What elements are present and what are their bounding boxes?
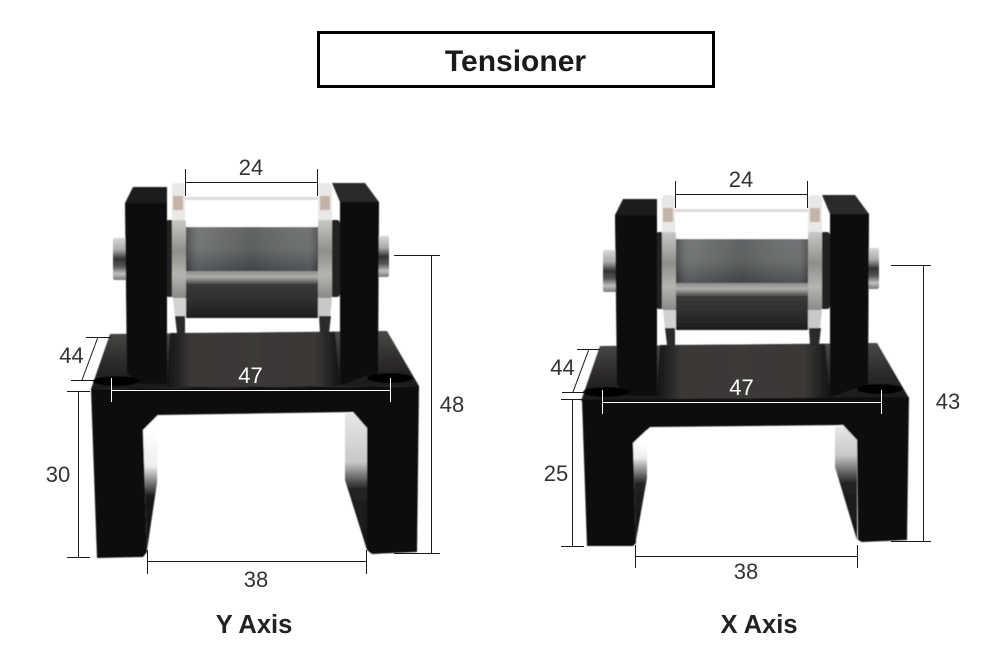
white dimension line: Y axis width (111, 378, 391, 402)
dimension lines: X axis (561, 181, 931, 568)
photo: X axis tensioner (581, 195, 909, 546)
dimension labels: X axis: 43 (936, 389, 960, 414)
dimension labels: X axis: 24 (729, 167, 753, 192)
photo: Y axis tensioner (91, 183, 419, 558)
dimension labels: Y axis: 38 (244, 567, 268, 592)
dimension labels: X axis (544, 167, 960, 584)
dimension labels: X axis: 38 (734, 559, 758, 584)
title box: Tensioner (445, 45, 586, 78)
dimension labels: Y axis: 24 (239, 155, 263, 180)
dimension labels: X axis: 47 (729, 375, 754, 400)
dimension labels: Y axis: 30 (46, 462, 70, 487)
dimension labels: X axis: 44 (550, 355, 575, 380)
dimension lines: Y axis (67, 169, 440, 574)
white dimension line: X axis width (602, 390, 882, 414)
dimension labels: Y axis: 48 (440, 392, 464, 417)
title box (318, 32, 714, 86)
caption: X Axis: X Axis (720, 611, 798, 639)
dimension labels: X axis: 25 (544, 461, 568, 486)
dimension labels: Y axis (46, 155, 464, 592)
dimension labels: Y axis: 47 (238, 363, 263, 388)
caption: Y Axis: Y Axis (216, 611, 292, 639)
dimension labels: Y axis: 44 (59, 343, 84, 368)
